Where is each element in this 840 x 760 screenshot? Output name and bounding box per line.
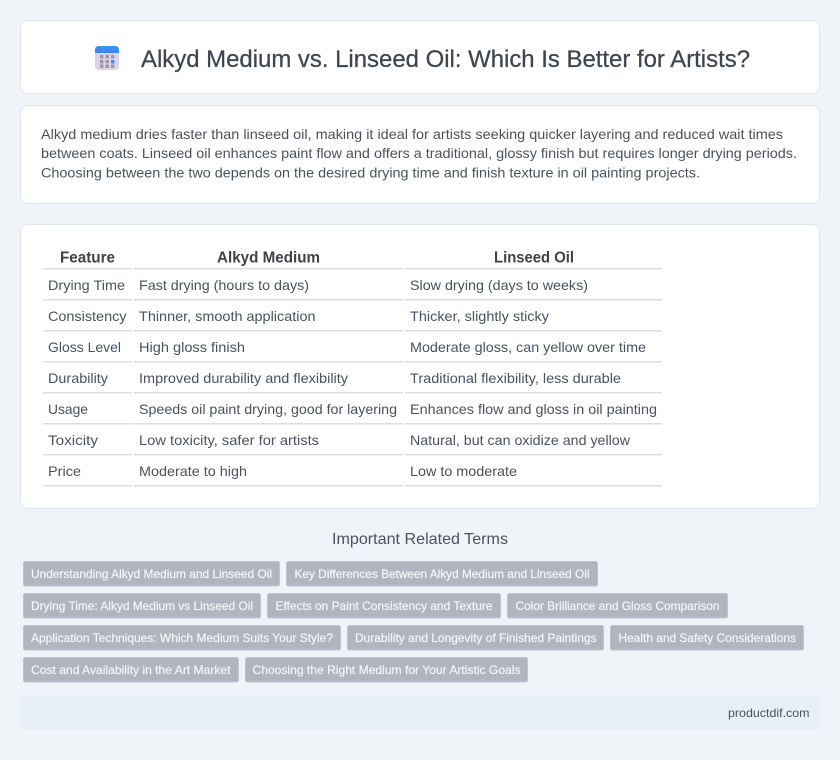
tag: [24, 594, 260, 618]
table row: drying time: Fast drying (hours to days): [139, 277, 309, 293]
tag: Durability and Longevity of Finished Paintings: [355, 631, 596, 645]
table row: durability: [48, 370, 621, 386]
text block: introduction: Alkyd medium dries faster than linseed oil, making it ideal for artists seeking quicker layering and reduced wait times: [41, 126, 783, 142]
table header: Feature: [60, 250, 115, 266]
table row: toxicity: Natural, but can oxidize and yellow: [410, 432, 631, 448]
table row: toxicity: Low toxicity, safer for artists: [139, 432, 319, 448]
tag: Drying Time: Alkyd Medium vs Linseed Oil: [31, 599, 253, 613]
tag: [610, 626, 804, 650]
text block: introduction: between coats. Linseed oil enhances paint flow and offers a traditional, glossy finish but requires longer drying periods.: [41, 145, 797, 161]
table row: usage: [48, 401, 657, 417]
tag: Effects on Paint Consistency and Texture: [276, 599, 493, 613]
table row: drying time: Drying Time: [48, 277, 125, 293]
tag: [24, 658, 238, 682]
table row: consistency: [48, 308, 549, 324]
tag: [348, 626, 604, 650]
table row: gloss level: Moderate gloss, can yellow over time: [410, 339, 646, 355]
table row: price: [48, 463, 517, 479]
text block: introduction: [41, 126, 797, 180]
tag: [286, 562, 598, 586]
table row: gloss level: Gloss Level: [48, 339, 121, 355]
table row: consistency: Consistency: [48, 308, 126, 324]
related term tags: [24, 562, 804, 682]
icon: calendar: [95, 46, 119, 70]
tag: [246, 658, 528, 682]
table row: consistency: Thinner, smooth application: [139, 308, 316, 324]
table row: gloss level: [48, 339, 646, 355]
table row: consistency: Thicker, slightly sticky: [410, 308, 549, 324]
title: Alkyd Medium vs. Linseed Oil: Which Is Better for Artists?: [141, 46, 750, 73]
tag: Key Differences Between Alkyd Medium and Linseed Oil: [294, 567, 590, 581]
text block: introduction: Choosing between the two depends on the desired drying time and finish texture in oil painting projects.: [41, 164, 700, 180]
table row: drying time: [48, 277, 588, 293]
table row: usage: Usage: [48, 401, 88, 417]
table row: price: Low to moderate: [410, 463, 517, 479]
tag: [268, 594, 500, 618]
table row: drying time: Slow drying (days to weeks): [410, 277, 588, 293]
table header: Linseed Oil: [494, 250, 574, 266]
tag: Choosing the Right Medium for Your Artistic Goals: [252, 663, 520, 677]
table header: [60, 250, 574, 266]
table row: durability: Traditional flexibility, less durable: [410, 370, 621, 386]
footer: [20, 696, 820, 730]
tag: Cost and Availability in the Art Market: [31, 663, 231, 677]
tag: [508, 594, 728, 618]
table row: gloss level: High gloss finish: [139, 339, 245, 355]
table row: price: Moderate to high: [139, 463, 247, 479]
tag: Application Techniques: Which Medium Suits Your Style?: [31, 631, 333, 645]
panel: comparison table: [20, 224, 820, 508]
tag: [24, 626, 340, 650]
footer source text: productdif.com: [728, 706, 810, 720]
tag: Understanding Alkyd Medium and Linseed Oil: [31, 567, 272, 581]
tag: [24, 562, 280, 586]
table row: toxicity: Toxicity: [48, 432, 98, 448]
table row: usage: Speeds oil paint drying, good for layering: [139, 401, 397, 417]
panel: header: [20, 20, 820, 94]
table row: durability: Durability: [48, 370, 108, 386]
table row: price: Price: [48, 463, 81, 479]
panel: introduction: [20, 106, 820, 204]
tag: Color Brilliance and Gloss Comparison: [516, 599, 720, 613]
table row: toxicity: [48, 432, 631, 448]
table row: usage: Enhances flow and gloss in oil painting: [410, 401, 657, 417]
table row: durability: Improved durability and flexibility: [139, 370, 348, 386]
tag: Health and Safety Considerations: [618, 631, 796, 645]
table header: Alkyd Medium: [217, 250, 320, 266]
heading: important related terms: Important Related Terms: [332, 531, 508, 548]
